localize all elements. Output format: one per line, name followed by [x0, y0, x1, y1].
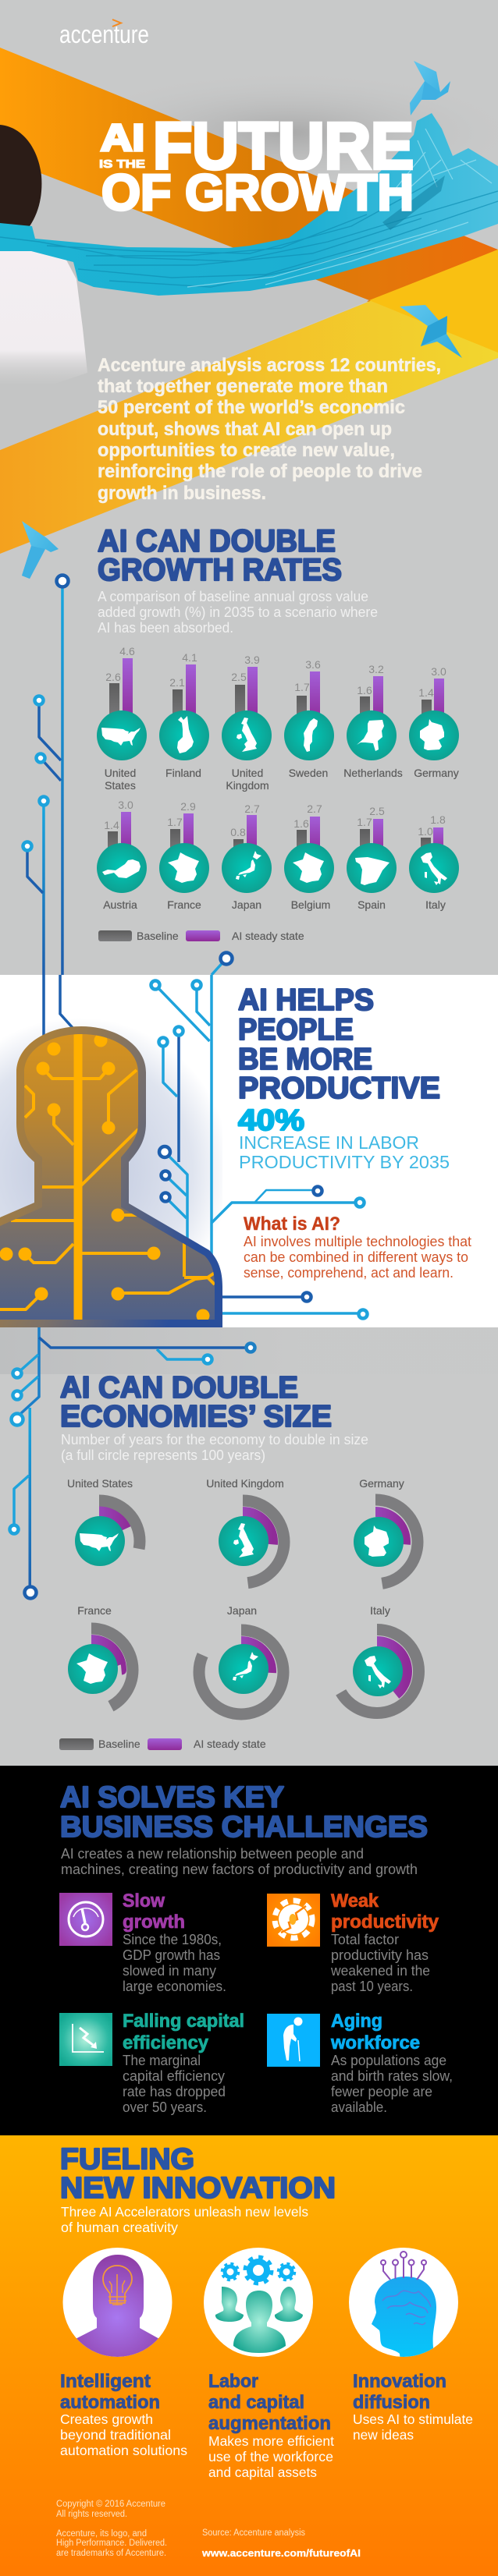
icon: origami bird lower [22, 521, 59, 579]
challenge: falling capital efficiency: over 50 years. [123, 2099, 207, 2115]
bar chart: row 1: United [232, 767, 263, 779]
description: added growth (%) in 2035 to a scenario where [98, 604, 378, 620]
heading [238, 983, 440, 1105]
bar chart: row 2: 1.7 [167, 816, 183, 828]
bar chart: row 2: 1.7 [357, 816, 372, 828]
heading [98, 524, 342, 587]
intro text: opportunities to create new value, [98, 440, 395, 461]
intro text: output, shows that AI can open up [98, 419, 392, 440]
challenge: slow growth: Since the 1980s, [123, 1932, 222, 1947]
stat: 40%: INCREASE IN LABOR [239, 1132, 419, 1153]
icon: origami bird middle [400, 305, 462, 358]
stat: 40%: 40% [238, 1104, 304, 1137]
accelerator: innovation diffusion: diffusion [353, 2392, 430, 2413]
bar chart: row 2 [97, 799, 459, 911]
challenge: falling capital efficiency: The marginal [123, 2053, 201, 2068]
bar chart: row 1: Kingdom [226, 779, 269, 792]
copyright [56, 2500, 167, 2558]
heading: AI HELPS [238, 983, 374, 1017]
challenge: falling capital efficiency: capital efficiency [123, 2068, 225, 2084]
accelerator: intelligent automation: Creates growth [60, 2411, 153, 2427]
description: AI creates a new relationship between people and [61, 1846, 364, 1862]
accelerator: innovation diffusion: new ideas [353, 2427, 414, 2443]
accelerator: innovation diffusion: Innovation [353, 2371, 446, 2392]
title: FUTURE [153, 109, 414, 182]
callout: what is AI: What is AI? [244, 1214, 340, 1235]
bar chart: row 2: 1.0 [418, 825, 433, 838]
description [98, 589, 378, 636]
chart: France: France [77, 1604, 112, 1617]
bar chart: row 1: 4.1 [182, 651, 197, 664]
accelerator: intelligent automation [60, 2371, 187, 2458]
challenge: weak productivity: weakened in the [330, 1963, 430, 1979]
yellow overlap triangle [369, 250, 498, 353]
bar chart: row 1: 3.0 [431, 665, 446, 678]
challenge: weak productivity: productivity [331, 1912, 439, 1933]
description [61, 1432, 368, 1463]
challenge: weak productivity: Total factor [331, 1932, 399, 1947]
icon: falling chart [59, 2013, 112, 2066]
accelerator: labor and capital augmentation: Makes more efficient [208, 2433, 334, 2449]
background [0, 0, 498, 1766]
legend [98, 930, 304, 942]
challenge: aging workforce: workforce [330, 2032, 420, 2053]
chart: Italy [336, 1604, 418, 1713]
bar chart: row 2: 1.8 [430, 813, 446, 826]
circuit lines: productivity [44, 975, 367, 1318]
heading: ECONOMIES’ SIZE [60, 1400, 332, 1433]
panel: business challenges [0, 1766, 498, 2135]
description: (a full circle represents 100 years) [61, 1447, 265, 1463]
legend: AI steady state [194, 1738, 266, 1750]
yellow diagonal band [0, 250, 498, 554]
chart: Japan: Japan [227, 1604, 257, 1617]
panel: economies size [0, 1327, 498, 1766]
legend [59, 1738, 266, 1750]
bar chart: row 1: 4.6 [119, 645, 135, 657]
stat: 40% [238, 1104, 450, 1172]
challenge: slow growth: GDP growth has [123, 1947, 220, 1963]
heading [60, 2143, 336, 2205]
bar chart: row 2: 1.6 [293, 817, 309, 830]
icon: elderly person [267, 2014, 320, 2067]
accelerator: innovation diffusion: Uses AI to stimulate [353, 2411, 473, 2427]
accelerator: intelligent automation: Intelligent [60, 2371, 151, 2392]
intro text [98, 355, 441, 504]
chart: United States: United States [67, 1477, 133, 1490]
description [61, 1846, 418, 1877]
bar chart: row 1 [97, 645, 459, 792]
heading: AI CAN DOUBLE [98, 524, 336, 558]
challenge: falling capital efficiency: Falling capital [123, 2011, 244, 2032]
heading: BE MORE [238, 1043, 372, 1076]
copyright: High Performance. Delivered. [56, 2539, 167, 2548]
heading: BUSINESS CHALLENGES [60, 1811, 428, 1844]
accenture logo: accenture [59, 20, 149, 48]
bar chart: row 2: Japan [232, 898, 261, 911]
bar chart: row 2: 3.0 [118, 799, 133, 811]
heading: PRODUCTIVE [238, 1072, 440, 1105]
accelerator: intelligent automation: automation [60, 2392, 160, 2413]
copyright: Accenture, its logo, and [56, 2529, 147, 2539]
bar chart: row 1: United [105, 767, 136, 779]
bar chart: row 1: 3.9 [244, 654, 260, 666]
accelerator: labor and capital augmentation: and capital [208, 2392, 304, 2413]
accelerator: labor and capital augmentation: use of the workforce [208, 2449, 333, 2464]
heading [60, 1781, 428, 1844]
panel: productivity [0, 975, 498, 1327]
challenge: falling capital efficiency [59, 2011, 244, 2115]
circuit lines: growth section [23, 576, 233, 975]
chart: United Kingdom: United Kingdom [206, 1477, 284, 1490]
bar chart: row 2: 1.4 [104, 819, 119, 831]
intro text: 50 percent of the world’s economic [98, 397, 405, 418]
description: machines, creating new factors of productivity and growth [61, 1862, 418, 1877]
source and url: www.accenture.com/futureofAI [201, 2547, 361, 2559]
challenge: aging workforce: fewer people are [331, 2084, 432, 2099]
heading: FUELING [60, 2143, 194, 2176]
panel: growth rates [97, 524, 459, 942]
icon: origami bird top [410, 61, 450, 115]
challenge: aging workforce [267, 2011, 453, 2115]
accelerator: intelligent automation: automation solutions [60, 2443, 187, 2458]
description: Three AI Accelerators unleash new levels [61, 2204, 308, 2220]
bar chart: row 1: 3.6 [305, 658, 321, 671]
bar chart: row 1: 1.4 [418, 686, 434, 699]
callout: what is AI: AI involves multiple technologies that [244, 1234, 471, 1249]
copyright: Copyright © 2016 Accenture [56, 2500, 165, 2509]
icon: gears [267, 1894, 320, 1947]
heading: NEW INNOVATION [60, 2172, 336, 2205]
chart: United Kingdom [201, 1477, 284, 1583]
heading: PEOPLE [238, 1013, 354, 1047]
challenge: slow growth: Slow [123, 1890, 165, 1912]
challenge: slow growth: large economies. [123, 1979, 226, 1994]
heading: GROWTH RATES [98, 553, 342, 587]
challenge: falling capital efficiency: efficiency [123, 2032, 209, 2053]
scarf [0, 113, 498, 296]
description: AI has been absorbed. [98, 620, 233, 636]
chart: Germany: Germany [359, 1477, 404, 1490]
title: IS THE [99, 158, 145, 171]
accelerator: labor and capital augmentation: augmentation [208, 2413, 331, 2434]
bar chart: row 2: Austria [103, 898, 137, 911]
bar chart: row 1: Netherlands [343, 767, 403, 779]
description: A comparison of baseline annual gross value [98, 589, 368, 604]
challenge: weak productivity: productivity has [331, 1947, 429, 1963]
person: hair and shirt [0, 125, 87, 384]
challenge: weak productivity: past 10 years. [331, 1979, 413, 1994]
bar chart: row 1: Germany [414, 767, 459, 779]
copyright: All rights reserved. [56, 2510, 127, 2519]
title: AI [101, 118, 144, 159]
bar chart: row 2: 2.7 [307, 803, 322, 815]
bar chart: row 1: 3.2 [368, 663, 384, 675]
challenge: aging workforce: and birth rates slow, [331, 2068, 453, 2084]
heading: AI SOLVES KEY [60, 1781, 284, 1814]
challenge: aging workforce: Aging [331, 2011, 382, 2032]
accelerator: innovation diffusion [353, 2371, 473, 2443]
bar chart: row 2: Belgium [291, 898, 330, 911]
callout: what is AI [244, 1214, 471, 1281]
bar chart: row 2: 2.7 [244, 803, 260, 815]
bar chart: row 1: Finland [165, 767, 201, 779]
challenge: weak productivity [267, 1890, 439, 1994]
challenge: slow growth: slowed in many [123, 1963, 216, 1979]
intro text: reinforcing the role of people to drive [98, 461, 422, 482]
bar chart: row 2: 2.5 [369, 805, 385, 817]
accelerator: labor and capital augmentation: Labor [208, 2371, 258, 2392]
chart: Germany [333, 1477, 418, 1584]
accelerator: intelligent automation: beyond traditional [60, 2427, 171, 2443]
challenge: aging workforce: As populations age [331, 2053, 446, 2068]
bar chart: row 2: Italy [425, 898, 446, 911]
chart: Japan [199, 1604, 283, 1714]
challenge: slow growth: growth [123, 1912, 185, 1933]
description: of human creativity [61, 2220, 178, 2235]
callout: what is AI: can be combined in different ways to [244, 1249, 468, 1265]
legend: Baseline [98, 1738, 141, 1750]
bar chart: row 2: 0.8 [230, 826, 246, 838]
title: OF GROWTH [101, 164, 414, 221]
panel: new innovation [0, 2135, 498, 2576]
challenge: weak productivity: Weak [331, 1890, 379, 1912]
panel: hero [0, 19, 498, 579]
AI person silhouette [0, 1026, 222, 1327]
bar chart: row 1: 2.1 [169, 676, 185, 689]
bar chart: row 2: France [167, 898, 201, 911]
challenge: aging workforce: available. [331, 2099, 387, 2115]
source and url [201, 2528, 361, 2559]
bar chart: row 1: 2.6 [105, 671, 121, 683]
icon: innovation diffusion head [349, 2248, 458, 2363]
challenge: falling capital efficiency: rate has dropped [123, 2084, 226, 2099]
icon: labor and capital augmentation [204, 2248, 313, 2357]
legend: AI steady state [232, 930, 304, 942]
gray cut below orange band [0, 158, 369, 450]
bar chart: row 2: 2.9 [180, 800, 196, 813]
bar chart: row 2: Spain [357, 898, 386, 911]
challenge: slow growth [59, 1890, 226, 1994]
chart: Italy: Italy [370, 1604, 390, 1617]
intro text: growth in business. [98, 483, 266, 504]
source and url: Source: Accenture analysis [202, 2528, 305, 2538]
chart: France [50, 1604, 133, 1711]
heading: AI CAN DOUBLE [60, 1371, 298, 1405]
callout: what is AI: sense, comprehend, act and learn. [244, 1265, 454, 1281]
intro text: Accenture analysis across 12 countries, [98, 355, 441, 376]
circuit lines: economies [9, 1327, 254, 1599]
title [99, 109, 414, 221]
accelerator: labor and capital augmentation [208, 2371, 334, 2480]
intro text: that together generate more than [98, 376, 388, 397]
heading [60, 1371, 332, 1433]
bar chart: row 1: 1.7 [294, 681, 310, 693]
legend: Baseline [137, 930, 179, 942]
accelerator: labor and capital augmentation: and capital assets [208, 2464, 317, 2480]
bar chart: row 1: States [105, 779, 136, 792]
copyright: are trademarks of Accenture. [56, 2549, 166, 2558]
chart: United States [59, 1477, 140, 1582]
orange diagonal band [0, 48, 498, 353]
icon: intelligent automation head [62, 2248, 172, 2363]
description [61, 2204, 308, 2235]
bar chart: row 1: 1.6 [357, 684, 372, 696]
stat: 40%: PRODUCTIVITY BY 2035 [239, 1152, 450, 1172]
icon: gauge [59, 1893, 112, 1946]
description: Number of years for the economy to double in size [61, 1432, 368, 1447]
bar chart: row 1: Sweden [289, 767, 328, 779]
bar chart: row 1: 2.5 [231, 671, 247, 683]
